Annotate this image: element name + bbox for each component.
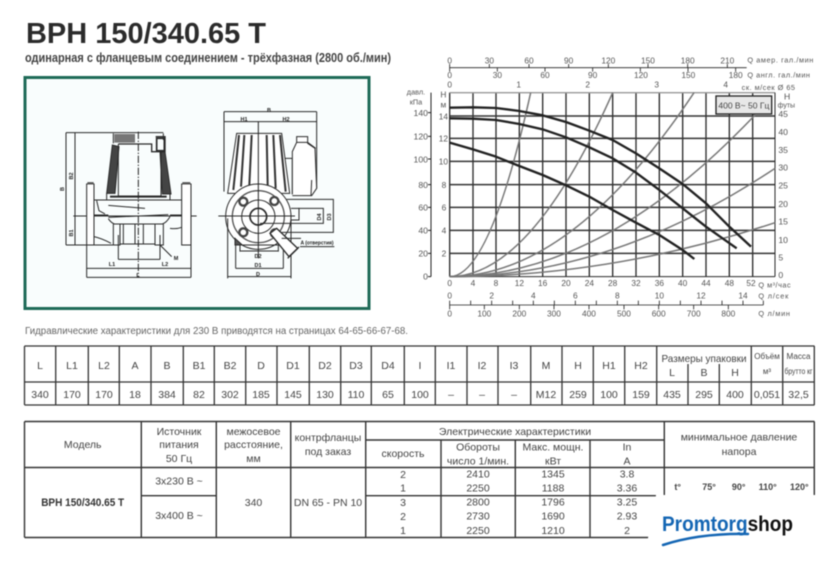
dimension labels — [60, 108, 334, 279]
table body text: 3.25 — [617, 496, 637, 508]
top flow axes: 3 — [654, 79, 659, 89]
table header text: скорость — [381, 448, 425, 460]
voltage label box: 400 В~ 50 Гц — [718, 100, 769, 110]
logo: Promtorgshop: Promtorgshop — [662, 513, 793, 536]
left pressure axes: 120 — [414, 132, 428, 142]
right head axis in feet: футы — [778, 103, 795, 110]
left pressure axes: 140 — [414, 108, 428, 118]
bottom flow axes: 8 — [494, 278, 499, 288]
dimension labels: A (отверстия) — [300, 240, 334, 246]
dimensions table values: – — [448, 389, 454, 401]
dimensions table values: M12 — [536, 389, 556, 401]
dimension labels: L1 — [109, 262, 115, 268]
table body text: 2250 — [466, 525, 490, 537]
dimensions table header: Объём — [754, 352, 780, 361]
dimensions table header: L — [669, 367, 675, 379]
dimensions table header: H1 — [602, 360, 616, 372]
dimensions table values: 170 — [95, 389, 113, 401]
bottom flow axes: 36 — [655, 278, 664, 288]
dimensions table values: 302 — [221, 389, 239, 401]
table header text: под заказ — [305, 446, 351, 458]
dimensions table values: 435 — [663, 389, 681, 401]
right head axis in feet: 0 — [778, 270, 783, 280]
dimensions table values: 82 — [193, 389, 205, 401]
top flow axes: 4 — [723, 79, 728, 89]
table body text: 90° — [732, 482, 746, 492]
table header text: минимальное давление — [681, 432, 797, 444]
table body text: 3.36 — [617, 482, 637, 494]
bottom flow axes: 6 — [573, 291, 578, 301]
left pressure axes: кПа — [410, 98, 423, 107]
dimensions table header: H — [574, 360, 582, 372]
table body text: 2800 — [466, 496, 490, 508]
dimensions table header: Размеры упаковки — [662, 353, 747, 365]
bottom flow axes: 4 — [471, 278, 476, 288]
table body text: 1690 — [541, 510, 565, 522]
bottom flow axes: 20 — [561, 278, 571, 288]
dimensions table values: 130 — [316, 389, 334, 401]
left pressure axes: давл. — [407, 88, 425, 97]
bottom flow axes: 12 — [515, 278, 524, 288]
dimensions table values: 185 — [252, 389, 270, 401]
dimension labels: B1 — [69, 229, 75, 237]
table header text: межосевое — [226, 426, 281, 438]
left pressure axes: 12 — [439, 134, 448, 144]
table body text: 3x230 В ~ — [155, 476, 203, 488]
top flow axes: 210 — [720, 55, 735, 65]
left pressure axes: 10 — [439, 157, 448, 167]
dimensions table header: H — [731, 367, 739, 379]
right head axis in feet: 5 — [778, 253, 783, 263]
pump performance curves — [450, 107, 751, 259]
bottom flow axes: 40 — [678, 278, 688, 288]
top flow axes — [447, 55, 813, 92]
left pressure axes: м — [440, 100, 446, 110]
dimensions table header: D1 — [286, 360, 300, 372]
bottom flow axes: 16 — [538, 278, 548, 288]
left pressure axes: 20 — [418, 249, 428, 259]
voltage label box — [716, 96, 772, 114]
bottom flow axes: 100 — [477, 308, 492, 318]
dimensions table values: 340 — [31, 389, 49, 401]
bottom flow axes: 28 — [608, 278, 618, 288]
left pressure axes: 4 — [442, 226, 447, 236]
bottom flow axes: 32 — [631, 278, 641, 288]
bottom flow axes: Q л/сек — [758, 292, 789, 301]
chart grid — [450, 93, 775, 277]
left pressure axes: 0 — [423, 271, 428, 281]
right head axis in feet — [778, 91, 795, 280]
dimensions table header: I — [419, 360, 421, 372]
bottom flow axes: 500 — [617, 308, 631, 318]
bottom flow axes: 14 — [738, 291, 748, 301]
table header text: напора — [722, 446, 757, 458]
table header text: In — [623, 442, 632, 454]
dimensions table values: 100 — [411, 389, 429, 401]
dimensions table header: I1 — [447, 360, 456, 372]
dimension labels: L2 — [162, 262, 168, 268]
table body text: 3 — [400, 497, 406, 509]
bottom flow axes: 400 — [582, 308, 596, 318]
table header text: Источник — [157, 426, 202, 438]
dimensions table values: 100 — [600, 389, 618, 401]
dimensions table header: A — [131, 360, 139, 372]
table body text: t° — [674, 482, 681, 492]
right head axis in feet: 10 — [778, 235, 788, 245]
right head axis in feet: 35 — [778, 145, 788, 155]
dimensions table header: L2 — [98, 360, 110, 372]
table body text: 1796 — [541, 496, 565, 508]
dimensions table header: B — [163, 360, 171, 372]
bottom flow axes: 200 — [512, 308, 527, 318]
bottom flow axes: 0 — [447, 308, 452, 318]
bottom flow axes: 4 — [531, 291, 536, 301]
right head axis in feet: 40 — [778, 127, 788, 137]
table body text: 3.8 — [620, 468, 634, 480]
top flow axes: 0 — [447, 70, 452, 80]
subtitle: одинарная с фланцевым соединением - трёхфазная (2800 об./мин) — [25, 51, 391, 65]
bottom flow axes — [447, 278, 791, 318]
dimensions table values: 32,5 — [788, 389, 809, 401]
left pressure axes: 14 — [439, 111, 448, 121]
bottom flow axes: 0 — [447, 278, 452, 288]
system curves — [450, 93, 775, 277]
dimensions table header: м³ — [763, 367, 771, 376]
top flow axes: 150 — [641, 55, 655, 65]
table header text: A — [623, 456, 631, 468]
top flow axes: 30 — [485, 55, 494, 65]
bottom flow axes: 300 — [547, 308, 561, 318]
left pressure axes: 40 — [418, 226, 428, 236]
dimensions table values: 65 — [382, 389, 394, 401]
dimensions table header: L1 — [66, 360, 78, 372]
dimensions table header: B — [700, 367, 708, 379]
table header text: Макс. мощн. — [523, 442, 583, 454]
dimensions table values: – — [479, 389, 485, 401]
table header text: питания — [159, 439, 199, 451]
dimension labels: D — [256, 272, 260, 278]
table body text: 1188 — [542, 482, 564, 494]
table header text — [64, 426, 797, 468]
top flow axes: 90 — [588, 70, 598, 80]
top flow axes: 0 — [447, 79, 452, 89]
dimensions table header: B1 — [193, 360, 206, 372]
table body text: 110° — [759, 482, 777, 492]
dimensions table header: D — [257, 360, 265, 372]
footnote: Гидравлические характеристики для 230 В приводятся на страницах 64-65-66-67-68. — [25, 326, 408, 337]
dimensions table header: D2 — [318, 360, 332, 372]
bottom flow axes: 0 — [447, 291, 452, 301]
bottom flow axes: 600 — [652, 308, 666, 318]
logo: Promtorgshop — [648, 495, 836, 563]
dimensions table values: 18 — [129, 389, 141, 401]
pump curve chart — [407, 55, 813, 318]
dimensions table values: – — [511, 389, 517, 401]
top flow axes: 120 — [634, 70, 648, 80]
bottom flow axes: 44 — [701, 278, 711, 288]
table body text: BPH 150/340.65 T — [41, 497, 124, 509]
dimensions table values: 170 — [63, 389, 81, 401]
dimensions table header: L — [37, 360, 43, 372]
right head axis in feet: 15 — [778, 217, 788, 227]
left pressure axes: 80 — [418, 180, 428, 190]
bottom flow axes: 8 — [615, 291, 620, 301]
dimension labels: D3 — [327, 213, 333, 221]
dimensions table values: 0,051 — [754, 389, 780, 401]
table header text: 50 Гц — [166, 453, 192, 465]
dimensions table values: 159 — [632, 389, 650, 401]
dimensions table header: M — [542, 360, 550, 372]
dimensions table header: B2 — [224, 360, 237, 372]
top flow axes: 60 — [524, 55, 534, 65]
right head axis in feet: 25 — [778, 181, 788, 191]
right head axis in feet: 45 — [778, 109, 788, 119]
dimensions table values: 295 — [695, 389, 713, 401]
electrical specifications table — [24, 422, 814, 538]
top flow axes: 2 — [585, 79, 590, 89]
dimension labels: B — [60, 187, 66, 191]
dimension labels: B2 — [69, 172, 75, 180]
top flow axes: Q амер. гал./мин — [747, 56, 813, 65]
bottom flow axes: 700 — [687, 308, 701, 318]
right head axis in feet: 20 — [778, 199, 788, 209]
dimensions table header: D3 — [349, 360, 363, 372]
left pressure axes: 8 — [442, 180, 447, 190]
dimensions table — [24, 346, 814, 405]
dimensions table values — [31, 389, 809, 401]
title: BPH 150/340.65 T — [26, 18, 266, 50]
table body text: 2.93 — [617, 510, 637, 522]
left pressure axes: 60 — [418, 203, 428, 213]
table body text: 340 — [245, 497, 262, 509]
left pressure axes: 2 — [442, 249, 447, 259]
bottom flow axes: 52 — [746, 278, 756, 288]
dimensions table values: 259 — [569, 389, 587, 401]
table header text: контрфланцы — [295, 432, 361, 444]
bottom flow axes: Q л/мин — [758, 309, 790, 318]
dimension labels: B — [267, 108, 271, 114]
dimensions table values: 400 — [726, 389, 744, 401]
bottom flow axes: 48 — [725, 278, 734, 288]
table body text: 2730 — [466, 510, 490, 522]
table header text: Модель — [64, 439, 102, 451]
table body text: 2 — [400, 469, 406, 481]
dimension labels: H2 — [282, 117, 290, 123]
dimensions table header: D4 — [381, 360, 395, 372]
table header text: расстояние, — [224, 439, 283, 451]
table body text: 1210 — [541, 525, 565, 537]
dimensions table values: 384 — [158, 389, 176, 401]
drawing: pump side view — [66, 132, 197, 277]
table body text: 2 — [624, 525, 630, 537]
table body text: 1 — [400, 482, 406, 494]
dimension labels: L — [136, 273, 140, 279]
left pressure axes: H — [440, 89, 446, 99]
dimensions table header: I2 — [478, 360, 487, 372]
table body text: 1 — [400, 525, 406, 537]
table body text: 2410 — [466, 468, 490, 480]
dimensions table header: H2 — [634, 360, 648, 372]
table body text: 2 — [400, 511, 406, 523]
top flow axes: 90 — [564, 55, 574, 65]
dimension labels: D2 — [254, 254, 262, 260]
table body text — [41, 468, 809, 537]
drawing: pump front view — [218, 112, 334, 278]
top flow axes: ск. м/сек Ø 65 — [742, 83, 795, 92]
table body text: 2250 — [466, 482, 490, 494]
left pressure axes: 6 — [442, 202, 447, 212]
top flow axes: 1 — [516, 79, 521, 89]
bottom flow axes: 2 — [489, 291, 494, 301]
top flow axes: 60 — [540, 70, 550, 80]
top flow axes: 180 — [729, 70, 743, 80]
table body text: 1345 — [541, 468, 565, 480]
table body text: 3x400 В ~ — [155, 510, 203, 522]
right head axis in feet: H — [784, 91, 790, 101]
table header text: число 1/мин. — [447, 456, 509, 468]
top flow axes: Q англ. гал./мин — [747, 70, 810, 79]
bottom flow axes: Q м³/час — [758, 280, 791, 289]
top flow axes: 30 — [493, 70, 502, 80]
top flow axes: 180 — [681, 55, 695, 65]
dimension labels: H1 — [240, 117, 248, 123]
dimensions table header: брутто кг — [784, 367, 813, 376]
left pressure axes — [407, 88, 448, 281]
table body text: 75° — [702, 482, 716, 492]
bottom flow axes: 24 — [585, 278, 594, 288]
right head axis in feet: 30 — [778, 163, 788, 173]
top flow axes: 0 — [447, 55, 452, 65]
table body text: DN 65 - PN 10 — [294, 497, 362, 509]
dimensions table values: 145 — [284, 389, 302, 401]
table header text: кВт — [545, 456, 561, 468]
dimension labels: D1 — [254, 263, 262, 269]
dimension labels: D4 — [317, 213, 323, 221]
table header text: мм — [246, 453, 261, 465]
dimensions table header — [37, 352, 813, 379]
dimension labels: M — [174, 256, 179, 262]
top flow axes: 150 — [681, 70, 696, 80]
table header text: Электрические характеристики — [439, 426, 591, 438]
bottom flow axes: 10 — [655, 291, 664, 301]
dimensions table header: I3 — [510, 360, 519, 372]
dimensions table values: 110 — [348, 389, 365, 401]
top flow axes: 120 — [601, 55, 616, 65]
bottom flow axes: 12 — [696, 291, 706, 301]
table header text: Обороты — [456, 442, 500, 454]
bottom flow axes: 800 — [721, 308, 736, 318]
left pressure axes: 100 — [414, 154, 428, 164]
table body text: 120° — [790, 482, 809, 492]
dimensions table header: Масса — [786, 352, 811, 361]
panel: pump dimension drawings — [25, 78, 369, 308]
